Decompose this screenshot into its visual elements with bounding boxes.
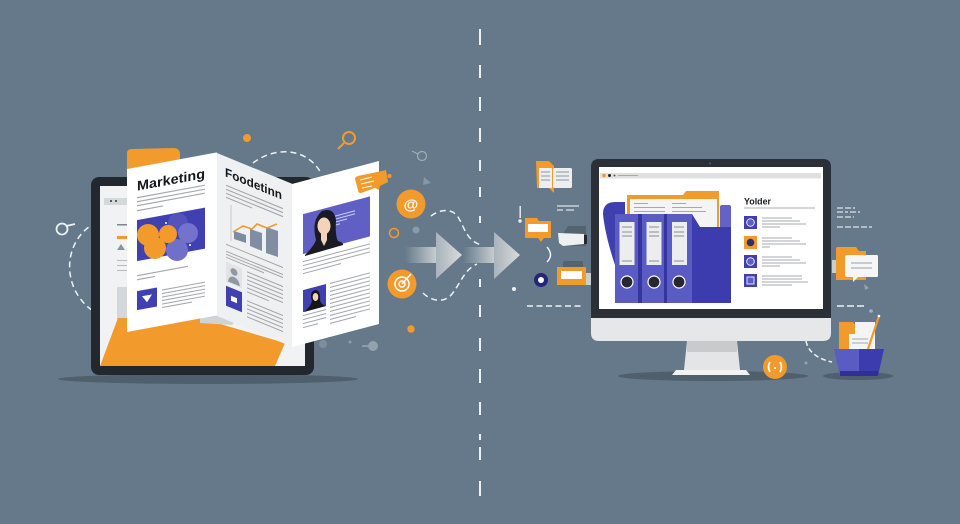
monitor stand [672, 341, 750, 375]
heading: Marketing: Marketing [137, 166, 205, 194]
page: left [127, 152, 217, 332]
portrait: woman small [304, 290, 326, 312]
orange folder front [100, 318, 285, 366]
center dashed divider [479, 29, 481, 496]
dashed path bottom [423, 264, 477, 300]
monitor shadow [618, 371, 808, 381]
orange folder tab [127, 148, 180, 172]
curve arc [547, 247, 550, 262]
portrait: woman large [305, 210, 343, 256]
exclamation mark [518, 206, 522, 223]
monitor frame [591, 159, 831, 341]
icon: target [388, 270, 416, 298]
small cursor [864, 284, 869, 290]
folder with binders [603, 191, 731, 303]
dashed cable [806, 341, 832, 362]
list item 4 [744, 274, 808, 287]
brochure [127, 152, 392, 347]
icon: folder speech bubble [832, 247, 878, 282]
navy ring icon [534, 273, 548, 287]
arrow 1 [405, 232, 462, 279]
icon: magnifier top [338, 132, 355, 149]
dashed orbit top [253, 152, 321, 173]
list item 2 [744, 236, 806, 249]
thumb tile [226, 286, 242, 312]
back purple [603, 202, 625, 265]
chart: bars and line [231, 205, 278, 257]
icon: printer [558, 226, 587, 246]
chart: bubbles [137, 213, 198, 261]
heading: Yolder: Yolder [744, 196, 771, 208]
gray triangle [423, 177, 431, 185]
icon: folder bubble [525, 218, 551, 242]
desk cup with folder [823, 315, 893, 380]
gray magnifier [412, 151, 426, 160]
middle icons and arrows [388, 151, 591, 333]
small icon tile [137, 287, 157, 310]
binder 1 [615, 214, 642, 303]
right side dashes [837, 208, 872, 227]
dashed orbit left [70, 222, 100, 315]
icon: at sign [396, 190, 426, 218]
left illustration: tablet and brochure [56, 132, 392, 384]
tablet [91, 177, 314, 375]
orange dot [243, 134, 251, 142]
gray dot [412, 226, 420, 234]
page: middle [217, 153, 292, 347]
binder 2 [642, 214, 667, 303]
small sparkle [869, 309, 873, 313]
orange dot lower [407, 325, 415, 333]
short dashes [557, 206, 579, 210]
dashed path top [431, 210, 481, 245]
decorative dots lower right [319, 340, 378, 351]
arrow 2 [463, 232, 520, 279]
dashes lower right [837, 305, 864, 307]
icon: open book [536, 161, 572, 193]
small sparkle [512, 287, 516, 291]
icon: orange note tag [355, 170, 392, 193]
page: right [292, 161, 379, 347]
right illustration: monitor [591, 159, 893, 381]
icon: orange phone circle [763, 355, 787, 379]
profile tile [226, 262, 242, 288]
heading: Foodetinn: Foodetinn [225, 165, 282, 203]
dashed rule [527, 305, 583, 307]
ground shadow [58, 374, 358, 384]
icon: at sign: @ [404, 196, 418, 214]
small ring [390, 228, 398, 238]
orange folder [627, 191, 719, 228]
binder 3 [667, 214, 692, 303]
browser bar [600, 173, 821, 178]
tablet screen details [104, 198, 128, 320]
list item 1 [744, 216, 806, 229]
list item 3 [744, 255, 806, 268]
icon: magnifier left [56, 224, 75, 234]
icon: folder with tab [557, 261, 591, 285]
front pocket [692, 214, 731, 303]
